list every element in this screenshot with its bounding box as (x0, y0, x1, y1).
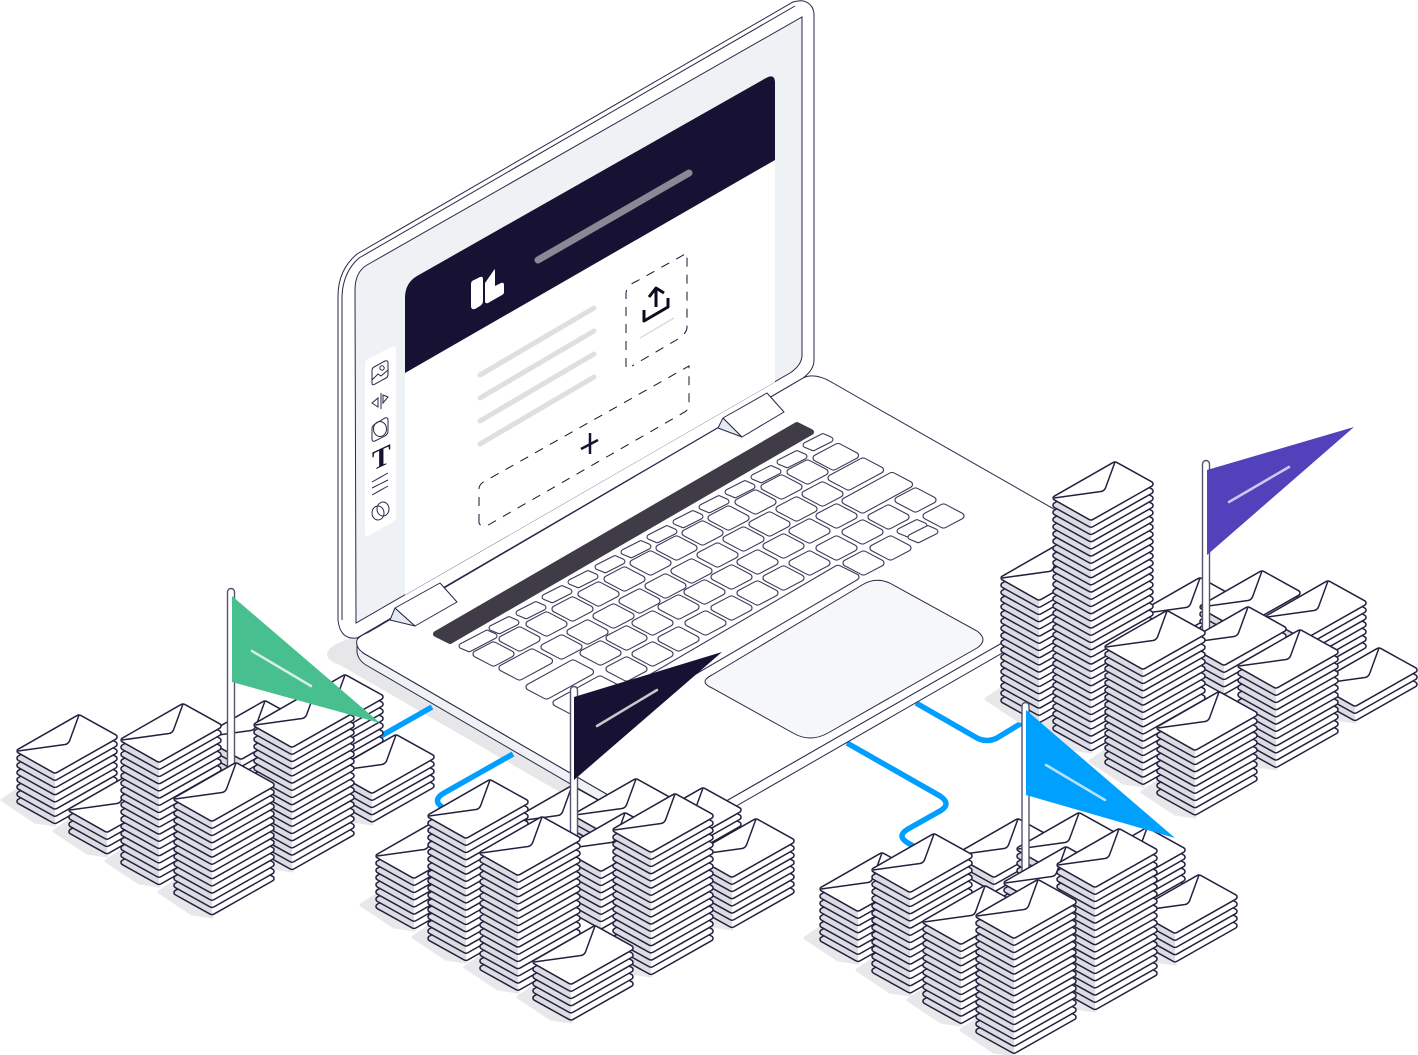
bottom row (613, 504, 964, 710)
icon: plus (581, 433, 598, 454)
header bar (405, 76, 775, 373)
envelope group: green flag (17, 588, 434, 915)
icon: image (372, 361, 388, 385)
icon: upload (644, 288, 668, 321)
blue flag (1022, 702, 1175, 882)
second row (499, 458, 884, 680)
logo (471, 269, 504, 309)
purple flag (1202, 427, 1354, 636)
icon: shape (372, 418, 388, 441)
right hinge (718, 393, 784, 437)
speaker strip (436, 425, 811, 641)
icon: text T: T (372, 438, 391, 478)
fourth row (553, 488, 936, 715)
number row (473, 444, 859, 666)
laptop screen (338, 1, 814, 638)
envelope group: blue flag (820, 702, 1237, 1053)
ground shadows of envelope stacks (2, 687, 1355, 1055)
envelope group: dark flag (376, 652, 794, 1020)
screen panel (355, 17, 802, 623)
laptop (338, 1, 1145, 843)
text lines (480, 308, 594, 444)
laptop ground shadow (327, 636, 610, 800)
icon: mirror (372, 393, 388, 409)
third row (526, 473, 913, 699)
screen white content (405, 160, 775, 595)
envelope group: purple flag (1001, 427, 1417, 815)
upload box (626, 253, 687, 367)
dark flag (570, 652, 722, 846)
icon: lines (372, 473, 388, 495)
trackpad (705, 580, 983, 738)
function row (459, 434, 833, 652)
toolbar (365, 346, 396, 536)
laptop base (357, 376, 1145, 843)
green flag (228, 588, 380, 778)
connector lines (381, 703, 1025, 847)
left hinge (390, 583, 457, 626)
keyboard (459, 434, 964, 715)
header title bar (538, 173, 689, 260)
icon: circles (372, 502, 389, 520)
add block box (479, 366, 689, 526)
